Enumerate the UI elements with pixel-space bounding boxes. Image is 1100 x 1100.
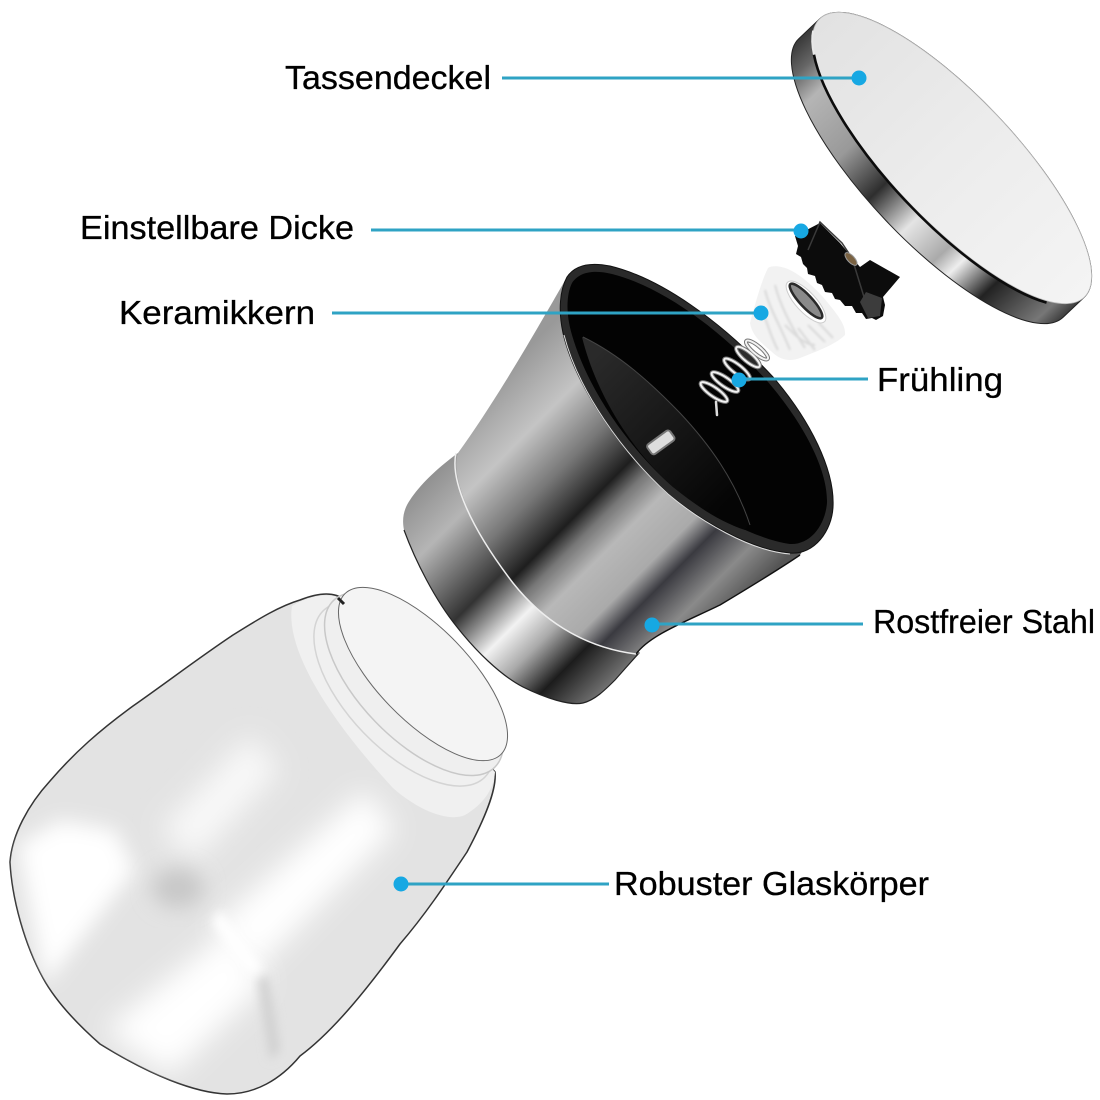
callout: Einstellbare Dicke — [80, 209, 808, 246]
steel band — [403, 453, 640, 704]
callout: Keramikkern: Keramikkern — [119, 294, 315, 331]
lid face — [775, 0, 1100, 340]
callout: Robuster Glaskörper: Robuster Glaskörper — [614, 865, 929, 902]
adjustment nut — [795, 222, 900, 320]
ceramic core — [750, 266, 845, 360]
lid — [754, 0, 1100, 360]
cup opening rim — [560, 264, 833, 553]
callout: Einstellbare Dicke: Einstellbare Dicke — [80, 209, 354, 246]
spring — [698, 338, 770, 415]
callout: Keramikkern — [119, 294, 768, 331]
callout: Tassendeckel: Tassendeckel — [285, 59, 491, 96]
lid rim — [754, 0, 1100, 360]
callout: Robuster Glaskörper — [394, 865, 929, 902]
internal pin — [646, 429, 676, 455]
callout: Frühling: Frühling — [877, 361, 1003, 398]
callout: Rostfreier Stahl — [644, 603, 1095, 640]
callout: Rostfreier Stahl: Rostfreier Stahl — [873, 603, 1095, 640]
callout: Tassendeckel — [285, 59, 866, 96]
steel cup — [456, 277, 830, 654]
callout: Frühling — [732, 361, 1003, 398]
cup interior — [568, 272, 827, 544]
jar neck — [283, 561, 534, 817]
jar: robust glass body — [10, 561, 534, 1094]
grinder body: stainless steel — [403, 264, 833, 704]
